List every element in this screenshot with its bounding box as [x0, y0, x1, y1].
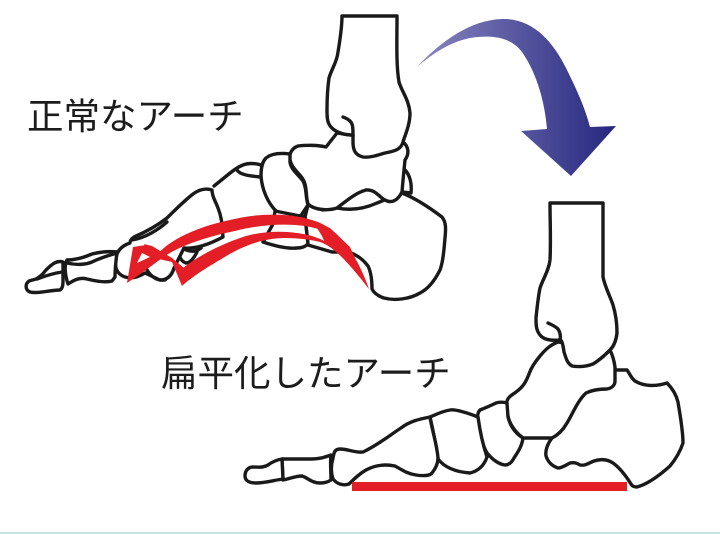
bone: distal toe: [26, 261, 63, 293]
bone: talus: [289, 133, 408, 210]
bottom teal border: [0, 532, 720, 534]
bone: cuneiform: [214, 164, 261, 186]
skeleton: normal foot: [26, 16, 446, 299]
label: flattened arch: 扁平化したアーチ: [161, 353, 451, 394]
bone: tibia: [327, 16, 410, 157]
band: upper arch: [127, 215, 369, 289]
bone: tibia hook: [548, 323, 560, 341]
bone: cuboid: [263, 211, 308, 248]
bone: proximal toe: [65, 252, 117, 284]
bone: metatarsal: [332, 417, 438, 485]
flat arch: red bar: [352, 482, 627, 491]
band: diagonal crossing: [144, 244, 184, 286]
skeleton: flattened foot: [245, 203, 683, 487]
bone: metatarsal: [115, 189, 223, 280]
band: lower arch: [182, 232, 369, 289]
bone: cuneiform: [477, 402, 523, 465]
bone: tibia: [536, 203, 617, 367]
bone: proximal toe: [282, 455, 331, 483]
bone: toe detail: [37, 272, 62, 279]
bone: calcaneus: [546, 370, 683, 487]
bone: talus: [507, 342, 615, 438]
bone: tibia hook: [343, 117, 353, 136]
bone: navicular: [261, 153, 308, 217]
arrow: curved downward: [417, 19, 616, 176]
bone: calcaneus: [305, 193, 446, 299]
band: merged right end: [312, 220, 369, 289]
bone: metatarsal detail: [132, 222, 201, 280]
bone: distal toe: [245, 459, 283, 483]
label: normal arch: 正常なアーチ: [27, 96, 244, 137]
arch: red bands over normal foot: [127, 215, 369, 289]
bone: adjacent cuneiform: [430, 410, 487, 473]
bone: toe detail: [67, 253, 117, 264]
bone: sustentaculum: [402, 170, 411, 193]
